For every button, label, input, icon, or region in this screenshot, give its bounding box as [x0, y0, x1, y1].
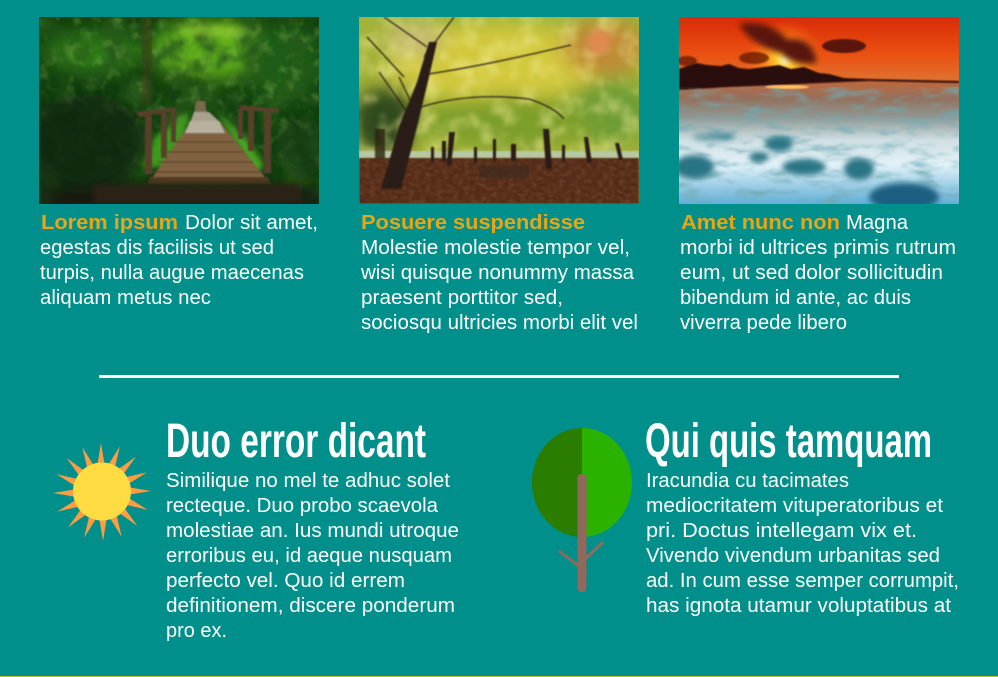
text block: Qui quis tamquam body: Iracundia cu tacimates — [646, 470, 849, 492]
caption: Amet nunc non: morbi id ultrices primis rutrum — [680, 237, 956, 259]
text block: Duo error dicant body: pro ex. — [166, 620, 227, 642]
caption: Lorem ipsum: aliquam metus nec — [40, 287, 211, 309]
caption: Lorem ipsum: Dolor sit amet, — [185, 212, 318, 234]
caption: Posuere suspendisse: praesent porttitor sed, — [361, 287, 563, 309]
caption: Amet nunc non — [680, 212, 956, 334]
caption: Posuere suspendisse: wisi quisque nonummy massa — [360, 262, 635, 284]
text block: Duo error dicant body: molestiae an. Ius mundi utroque — [166, 520, 459, 542]
icon: sun — [53, 443, 151, 541]
text block: Qui quis tamquam body — [646, 470, 959, 617]
text block: Duo error dicant body: recteque. Duo probo scaevola — [166, 495, 439, 517]
caption: Lorem ipsum: egestas dis facilisis ut sed — [40, 237, 274, 259]
text block: Qui quis tamquam body: ad. In cum esse semper corrumpit, — [646, 570, 959, 592]
text block: Qui quis tamquam body: Vivendo vivendum urbanitas sed — [646, 545, 940, 567]
caption: Lorem ipsum — [40, 212, 318, 309]
photo: forest path with wooden bridge — [39, 17, 319, 204]
text block: Qui quis tamquam body: has ignota utamur voluptatibus at — [646, 595, 951, 617]
text block: Duo error dicant body — [166, 470, 459, 642]
caption: Posuere suspendisse: Molestie molestie tempor vel, — [361, 237, 630, 259]
text block: Duo error dicant body: erroribus eu, id aeque nusquam — [166, 545, 452, 567]
caption: Posuere suspendisse — [360, 212, 638, 334]
caption: Amet nunc non: bibendum id ante, ac duis — [680, 287, 911, 309]
icon: tree — [532, 428, 632, 592]
photo: autumn trees in a park — [352, 17, 654, 204]
caption: Amet nunc non: eum, ut sed dolor sollicitudin — [680, 262, 943, 284]
text block: Qui quis tamquam body: pri. Doctus intellegam vix et. — [646, 520, 917, 542]
photo: sunset over foaming sea — [674, 17, 959, 211]
caption: Posuere suspendisse: Posuere suspendisse — [361, 212, 585, 234]
text block: Duo error dicant body: perfecto vel. Quo id errem — [166, 570, 405, 592]
caption: Amet nunc non: viverra pede libero — [680, 312, 847, 334]
text block: Qui quis tamquam body: mediocritatem vituperatoribus et — [646, 495, 943, 517]
caption: Posuere suspendisse: sociosqu ultricies morbi elit vel — [361, 312, 638, 334]
heading: Duo error dicant: Duo error dicant — [166, 415, 426, 468]
caption: Amet nunc non: Amet nunc non — [681, 212, 840, 234]
caption: Amet nunc non: Magna — [846, 212, 909, 234]
text block: Duo error dicant body: Similique no mel te adhuc solet — [166, 470, 450, 492]
caption: Lorem ipsum: turpis, nulla augue maecenas — [40, 262, 304, 284]
caption: Lorem ipsum: Lorem ipsum — [41, 212, 178, 234]
text block: Duo error dicant body: definitionem, discere ponderum — [166, 595, 455, 617]
